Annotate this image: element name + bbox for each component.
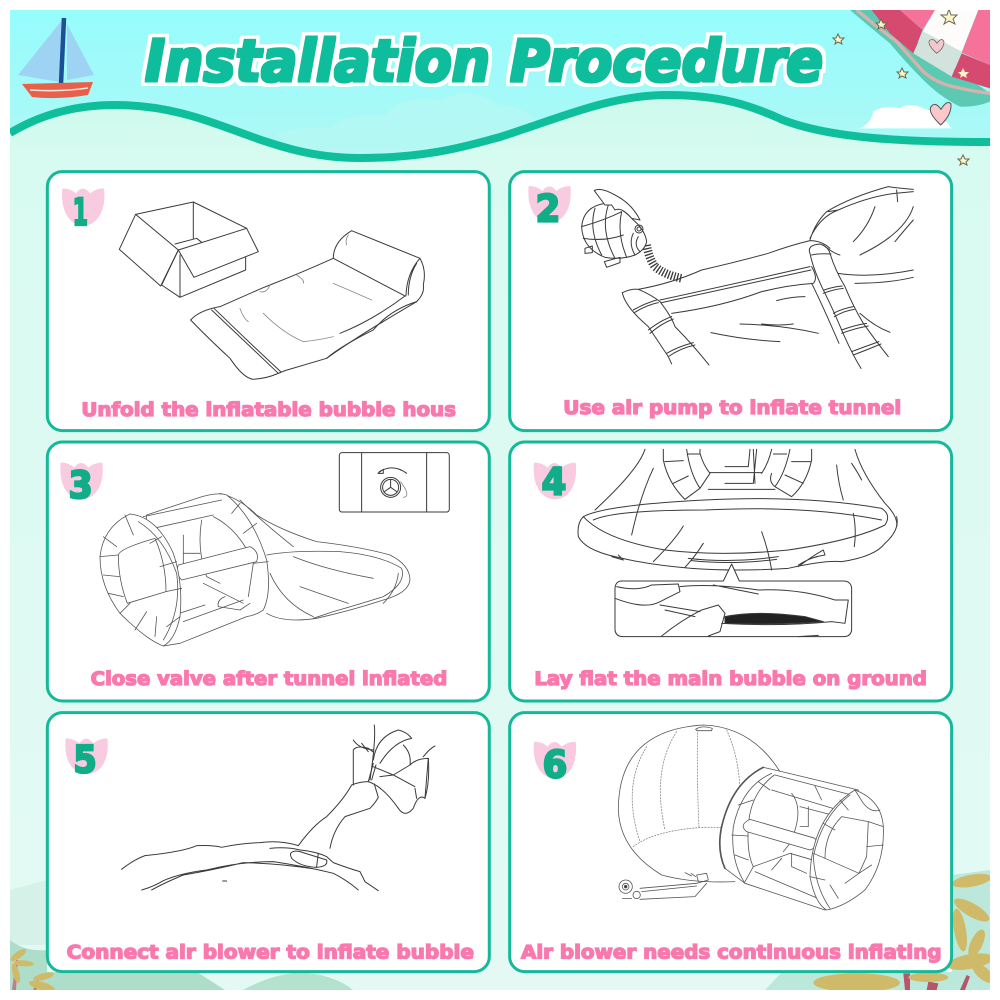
panel 5: air blower [47,713,489,972]
title: Installation [145,27,490,95]
panel 6: continuous inflating [510,713,952,972]
left palm [10,949,55,990]
illustration: rolled bubble [191,231,424,379]
cloud and heart [858,103,952,128]
panel 3: close valve [47,442,489,701]
illustration: air blower [619,873,708,899]
step badge 3: 3 [69,463,93,507]
step badge 5 [65,738,108,774]
caption 4: Lay flat the main bubble on ground [534,669,927,690]
inset: zipper detail [615,564,852,637]
step badge 3 [60,462,103,500]
illustration: tunnel frame [100,494,269,646]
inset: valve diagram [339,453,449,512]
illustration: bubble with blower sleeve [122,725,435,891]
caption 5: Connect air blower to inflate bubble [67,942,474,963]
palm trees [813,871,997,992]
step badge 6 [534,742,576,787]
panel 4 frame [510,442,952,701]
illustration: bubble dome [618,725,785,882]
step badge 1: 1 [73,190,88,234]
illustration: tunnel being inflated [622,187,913,368]
step badge 4 [534,462,576,500]
panel 1 frame [47,172,489,431]
icon: sailboat [18,18,94,98]
wave divider [10,95,990,158]
panel 2 frame [510,172,952,431]
panel 6 frame [510,713,952,972]
step badge 6: 6 [543,743,567,787]
step badge 5: 5 [73,738,97,782]
illustration: deflated bubble [220,493,410,620]
caption 3: Close valve after tunnel inflated [91,669,447,690]
panel 1: unfold [47,172,489,431]
step badge 2: 2 [536,187,560,231]
panel 4: lay flat [510,442,952,701]
illustration: pump [582,189,682,278]
step badge 1 [62,188,104,226]
panel 5 frame [47,713,489,972]
illustration: bubble on ground [578,449,897,570]
balloon decoration [850,10,990,107]
title: Procedure [510,27,823,95]
caption 2: Use air pump to inflate tunnel [563,398,901,419]
title [141,32,826,87]
step badge 4: 4 [542,460,566,504]
illustration: open box [119,202,258,297]
panel 3 frame [47,442,489,701]
stars [833,9,969,165]
step badge 2 [528,186,571,223]
caption 6: Air blower needs continuous inflating [521,942,942,963]
illustration: tunnel frame [720,767,883,910]
panel 2: air pump [510,172,952,431]
illustration: tunnel above ring [663,449,812,499]
caption 1: Unfold the inflatable bubble hous [81,400,456,421]
